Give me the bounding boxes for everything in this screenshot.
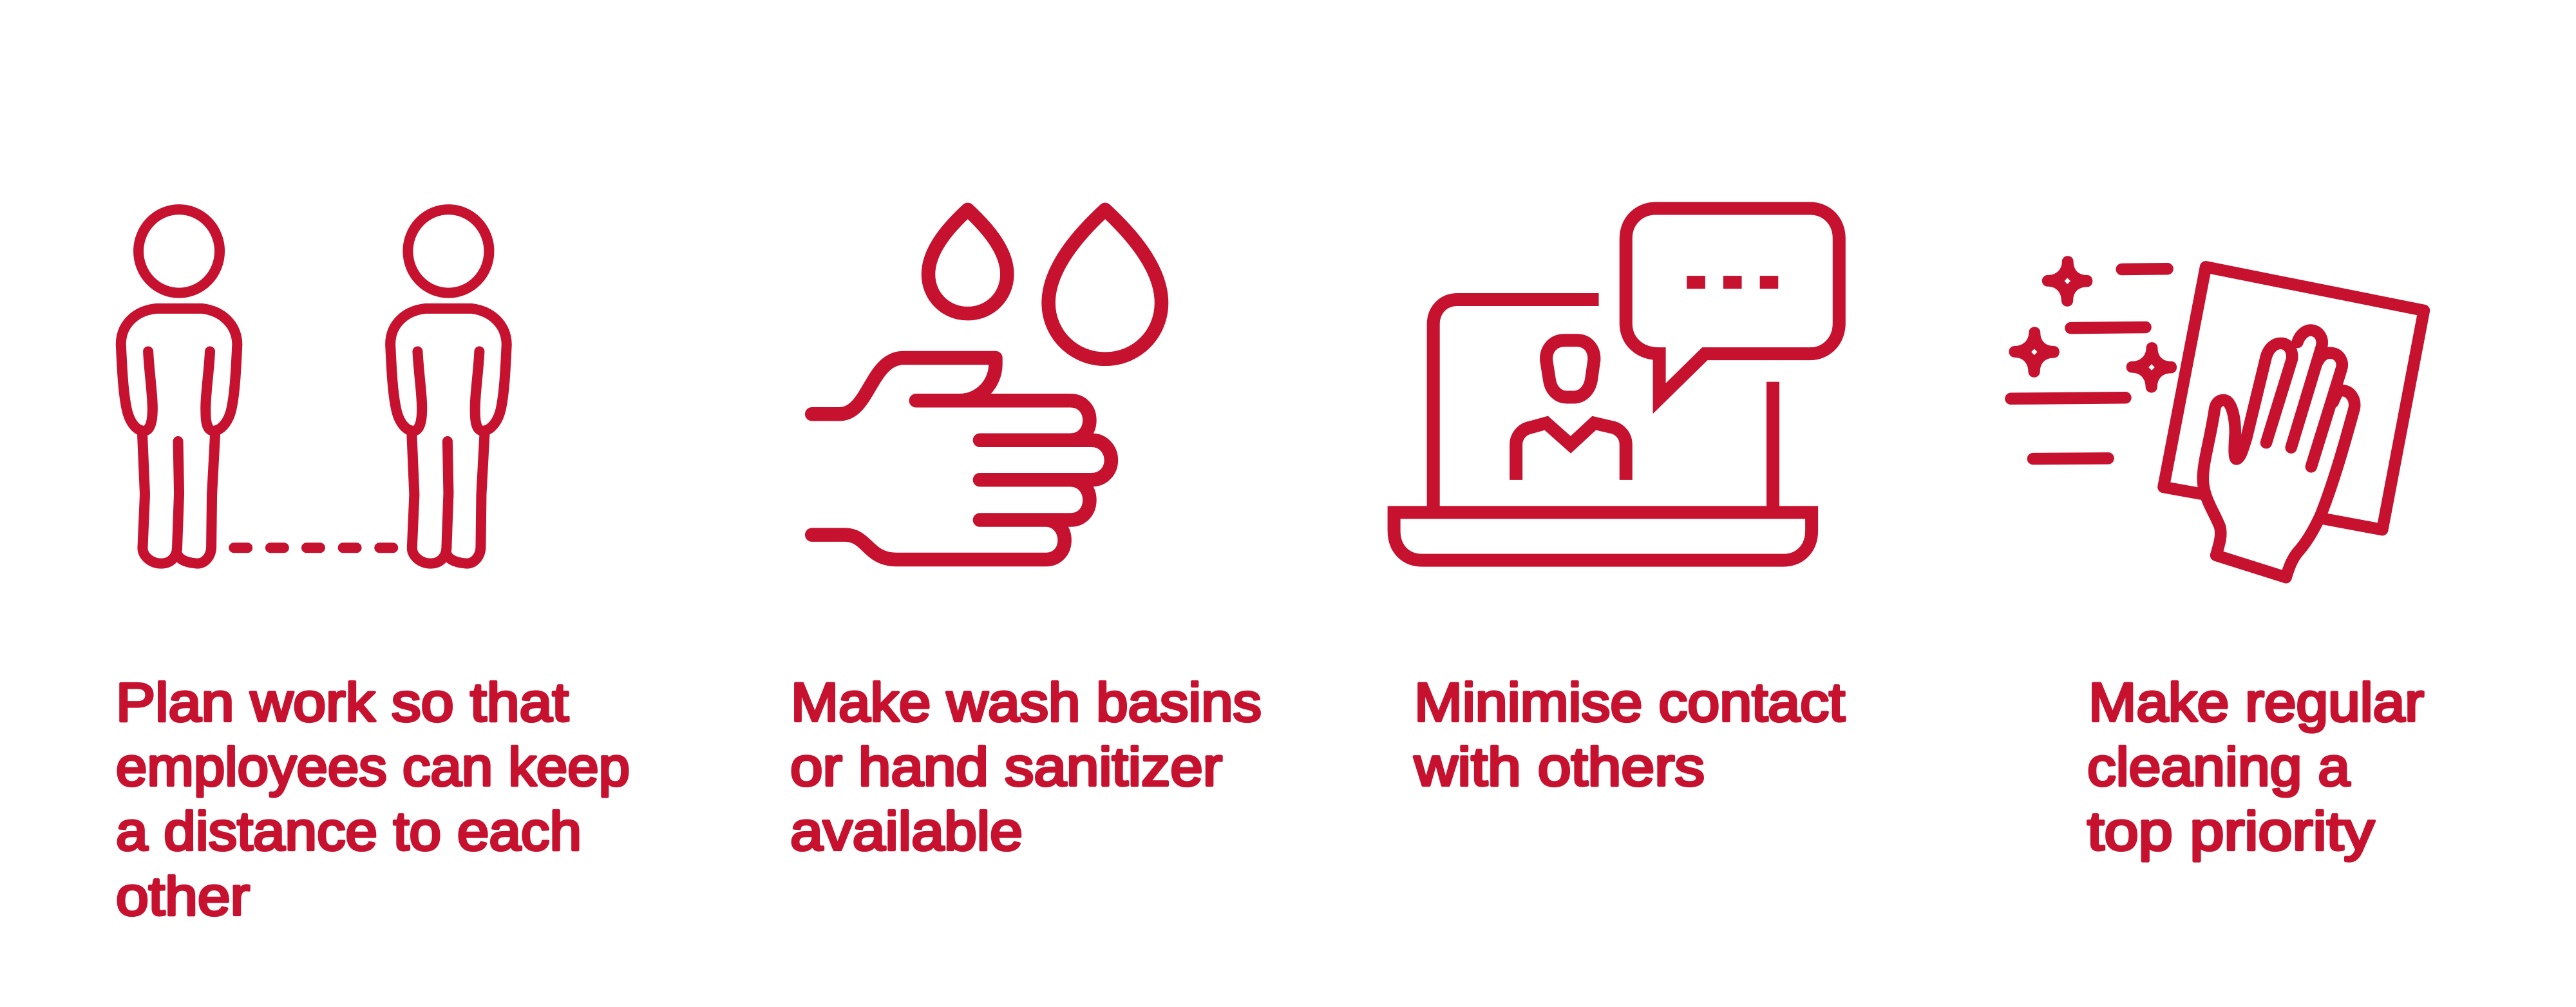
icon: hand with water drops: [812, 209, 1162, 560]
speech bubble: [1626, 208, 1839, 398]
text: plan work: employees can keep: [116, 736, 630, 797]
text: regular cleaning: [2087, 672, 2424, 861]
speech bubble dots: [1687, 276, 1778, 289]
text: wash basins: [790, 672, 1262, 861]
dashed distance line: [234, 542, 393, 553]
text: plan work: a distance to each: [116, 801, 582, 861]
text: regular cleaning: top priority: [2087, 801, 2374, 861]
text: plan work: [116, 672, 630, 926]
icon: laptop video call with speech bubble: [1394, 208, 1839, 561]
icon: hand wiping with cloth and sparkles: [2009, 256, 2424, 577]
text: regular cleaning: Make regular: [2088, 672, 2424, 733]
text: minimise contact: Minimise contact: [1414, 672, 1845, 733]
text: wash basins: Make wash basins: [791, 672, 1262, 733]
text: regular cleaning: cleaning a: [2087, 736, 2350, 797]
sparkles: [2009, 256, 2177, 393]
person shoulders: [1516, 423, 1626, 480]
text: plan work: other: [116, 866, 250, 926]
panel: regular cleaning: [2009, 256, 2424, 861]
hand outline: [812, 358, 1111, 560]
text: minimise contact: [1414, 672, 1845, 797]
text: wash basins: or hand sanitizer: [790, 736, 1222, 797]
cloth: [2163, 267, 2424, 530]
motion lines: [2011, 269, 2168, 459]
text: minimise contact: with others: [1414, 736, 1705, 797]
person left: [121, 209, 237, 564]
panel: hand washing: [790, 209, 1262, 861]
panel: minimise contact: [1394, 208, 1845, 797]
person head: [1546, 340, 1594, 397]
wiping hand: [2203, 330, 2354, 577]
laptop screen frame: [1434, 300, 1773, 512]
text: plan work: Plan work so that: [116, 672, 569, 733]
small water drop: [929, 209, 1007, 314]
laptop base: [1394, 512, 1812, 561]
panel: keep distance: [116, 209, 630, 926]
large water drop: [1048, 209, 1162, 359]
person right: [390, 209, 507, 564]
icon: two people standing apart: [121, 209, 507, 564]
text: wash basins: available: [790, 801, 1023, 861]
